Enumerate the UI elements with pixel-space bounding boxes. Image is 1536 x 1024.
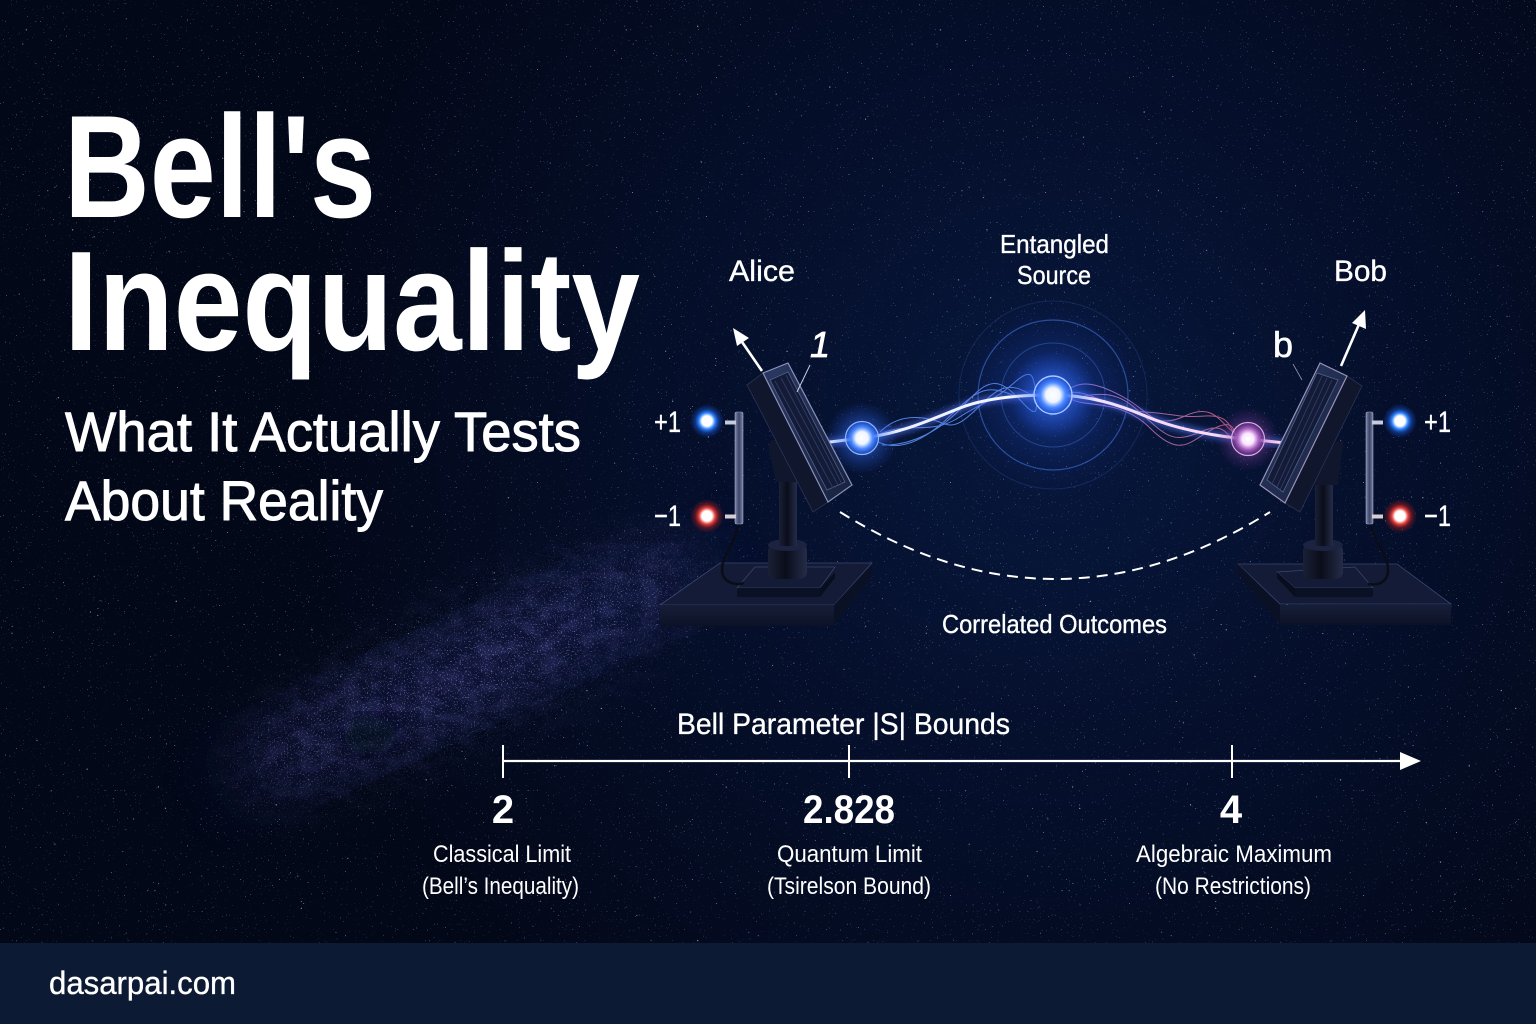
right photon node <box>1216 407 1280 471</box>
label: Bob: Bob <box>1334 255 1387 288</box>
subtitle: What It Actually Tests <box>65 400 581 463</box>
title: Bell's <box>64 85 376 248</box>
Bob optical base <box>1238 564 1451 625</box>
Bob detector station <box>1238 310 1451 625</box>
Alice +1 LED <box>690 404 724 438</box>
diagram labels <box>654 229 1451 639</box>
bound: algebraic maximum <box>1136 788 1332 900</box>
Alice setting arrow a <box>733 328 762 371</box>
footer bar <box>0 943 1536 1024</box>
Bob setting arrow b <box>1341 310 1366 366</box>
bound: quantum limit <box>767 788 931 900</box>
bound: quantum limit: (Tsirelson Bound) <box>767 873 931 900</box>
bound: classical limit <box>422 788 579 900</box>
number line axis <box>503 745 1421 778</box>
Alice optical base <box>660 563 872 626</box>
bounds chart <box>422 708 1421 900</box>
label: Entangled Source <box>1000 229 1109 290</box>
Bob readout arm <box>1366 412 1383 524</box>
Bob mount post <box>1303 441 1343 579</box>
label: Bob -1: −1 <box>1424 500 1451 533</box>
bound: classical limit: 2 <box>492 788 514 832</box>
bound: quantum limit: 2.828 <box>803 788 895 832</box>
bound: quantum limit: Quantum Limit <box>777 841 922 868</box>
label: Entangled Source: Entangled <box>1000 229 1109 259</box>
left photon node <box>826 402 898 474</box>
Alice setting label <box>797 324 830 392</box>
bound: algebraic maximum: (No Restrictions) <box>1155 873 1311 900</box>
title <box>64 85 640 381</box>
label: Alice +1: +1 <box>654 406 681 439</box>
label: Bob +1: +1 <box>1424 406 1451 439</box>
label: Correlated Outcomes: Correlated Outcomes <box>942 609 1167 639</box>
footer site name: dasarpai.com <box>49 965 236 1001</box>
Alice polarizer panel <box>747 363 852 512</box>
entangled source glow and rings <box>953 295 1153 495</box>
correlation dashed arc <box>840 512 1270 579</box>
entangled source node <box>1009 351 1097 439</box>
entangled photon wave <box>822 374 1285 446</box>
Bob -1 LED <box>1383 499 1417 533</box>
Alice mount post <box>768 440 807 579</box>
Bob setting label <box>1273 324 1302 380</box>
bound: classical limit: (Bell’s Inequality) <box>422 873 579 900</box>
label: Alice -1: −1 <box>654 500 681 533</box>
bound: algebraic maximum: 4 <box>1220 788 1243 832</box>
Alice detector station <box>660 324 872 626</box>
Bob +1 LED <box>1383 404 1417 438</box>
bound: classical limit: Classical Limit <box>433 841 571 868</box>
Bob polarizer panel <box>1260 363 1362 512</box>
title: Inequality <box>64 222 640 381</box>
Alice cable <box>722 525 744 584</box>
Bob setting label: b <box>1273 324 1293 365</box>
bound: algebraic maximum: Algebraic Maximum <box>1136 841 1332 868</box>
label: Entangled Source: Source <box>1017 260 1091 290</box>
subtitle <box>65 400 581 532</box>
subtitle: About Reality <box>65 469 383 532</box>
milky way band <box>198 510 736 834</box>
Alice setting label: 1 <box>810 324 830 365</box>
chart heading: Bell Parameter |S| Bounds <box>677 708 1010 741</box>
Alice -1 LED <box>690 499 724 533</box>
Bob cable <box>1368 525 1388 584</box>
label: Alice: Alice <box>729 255 795 288</box>
Alice readout arm <box>725 412 743 524</box>
